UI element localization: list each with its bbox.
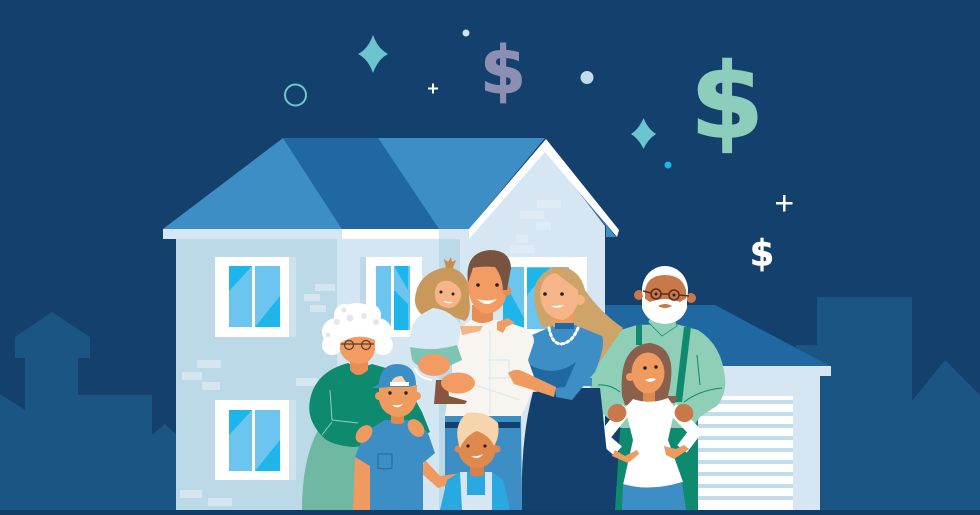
suspenders: [636, 325, 691, 402]
belt: [445, 422, 520, 428]
face: [379, 385, 417, 417]
shirt: [355, 420, 435, 510]
younger boy: [440, 412, 510, 510]
neck: [553, 312, 573, 327]
garage: [605, 305, 831, 511]
fascia: [163, 229, 469, 239]
top: [410, 308, 461, 350]
toddler girl: [410, 257, 515, 404]
grandmother: [302, 303, 430, 510]
top: [528, 325, 603, 400]
face: [467, 262, 507, 314]
granddaughter: [603, 343, 697, 510]
cap: [372, 364, 416, 388]
ring: [285, 84, 306, 106]
gable trim: [469, 139, 619, 239]
jeans: [622, 482, 686, 510]
hair: [534, 267, 623, 378]
collar: [555, 323, 574, 329]
white top: [623, 398, 683, 489]
shirt: [445, 320, 536, 416]
boots: [434, 380, 467, 404]
brick accents: [180, 200, 561, 506]
neck: [472, 305, 493, 323]
mother: [522, 267, 623, 510]
shirt lines: [598, 355, 722, 402]
neck: [391, 410, 404, 424]
hair: [415, 267, 470, 321]
window upper left: [215, 257, 296, 337]
bun: [444, 257, 456, 268]
top shade: [530, 362, 576, 390]
cardigan lower: [615, 415, 698, 510]
shirt: [590, 324, 725, 428]
plus signs: [428, 84, 792, 212]
dollar sign mint: $: [690, 41, 764, 162]
neck: [350, 355, 368, 375]
trousers: [445, 416, 522, 510]
head: [634, 266, 696, 324]
window middle: [360, 257, 422, 337]
left arm: [603, 408, 627, 451]
house: [163, 138, 619, 511]
hands on hips: [612, 445, 689, 463]
mother forearm: [508, 370, 556, 397]
grandfather: [590, 266, 725, 510]
neck: [643, 385, 655, 403]
roof: [163, 138, 545, 229]
skyline silhouette right: [796, 297, 980, 515]
shorts: [410, 345, 462, 369]
pearl necklace: [549, 328, 578, 344]
bottom strip: [0, 510, 980, 515]
window lower left: [215, 400, 296, 480]
hair: [322, 303, 393, 355]
boy with cap: [352, 364, 462, 510]
face: [435, 281, 461, 308]
sweater: [309, 363, 430, 447]
hair: [467, 250, 511, 290]
skyline silhouette left: [0, 312, 176, 515]
neck: [470, 462, 484, 476]
dollar sign purple: $: [480, 33, 526, 109]
face: [458, 428, 496, 468]
sparkle small: [631, 118, 656, 149]
hair: [457, 412, 498, 448]
skirt: [522, 388, 612, 510]
shirt lines: [475, 330, 520, 415]
dollar sign white: $: [750, 233, 774, 275]
dots: [462, 30, 672, 168]
face: [632, 352, 664, 394]
overalls: [460, 472, 492, 510]
sparkle large: [358, 35, 388, 73]
right arm: [672, 408, 695, 449]
skirt: [302, 430, 372, 510]
glasses: [341, 340, 374, 350]
cap opening: [391, 376, 407, 384]
sweater lines: [322, 390, 358, 435]
shoulder hands: [352, 416, 428, 446]
pocket: [378, 454, 392, 469]
father hands: [418, 318, 515, 394]
father: [445, 250, 536, 510]
arm: [460, 326, 483, 335]
face: [540, 273, 578, 320]
belt: [580, 378, 592, 386]
hair curls: [326, 308, 379, 338]
shirt: [440, 472, 510, 510]
arms: [353, 456, 462, 510]
grandfather hands: [604, 400, 697, 426]
face: [340, 337, 375, 364]
garage door: [698, 396, 793, 510]
bracelet: [415, 368, 432, 380]
walls: [176, 148, 605, 511]
collar: [648, 318, 677, 336]
window right: [503, 257, 587, 337]
hair: [622, 343, 678, 405]
